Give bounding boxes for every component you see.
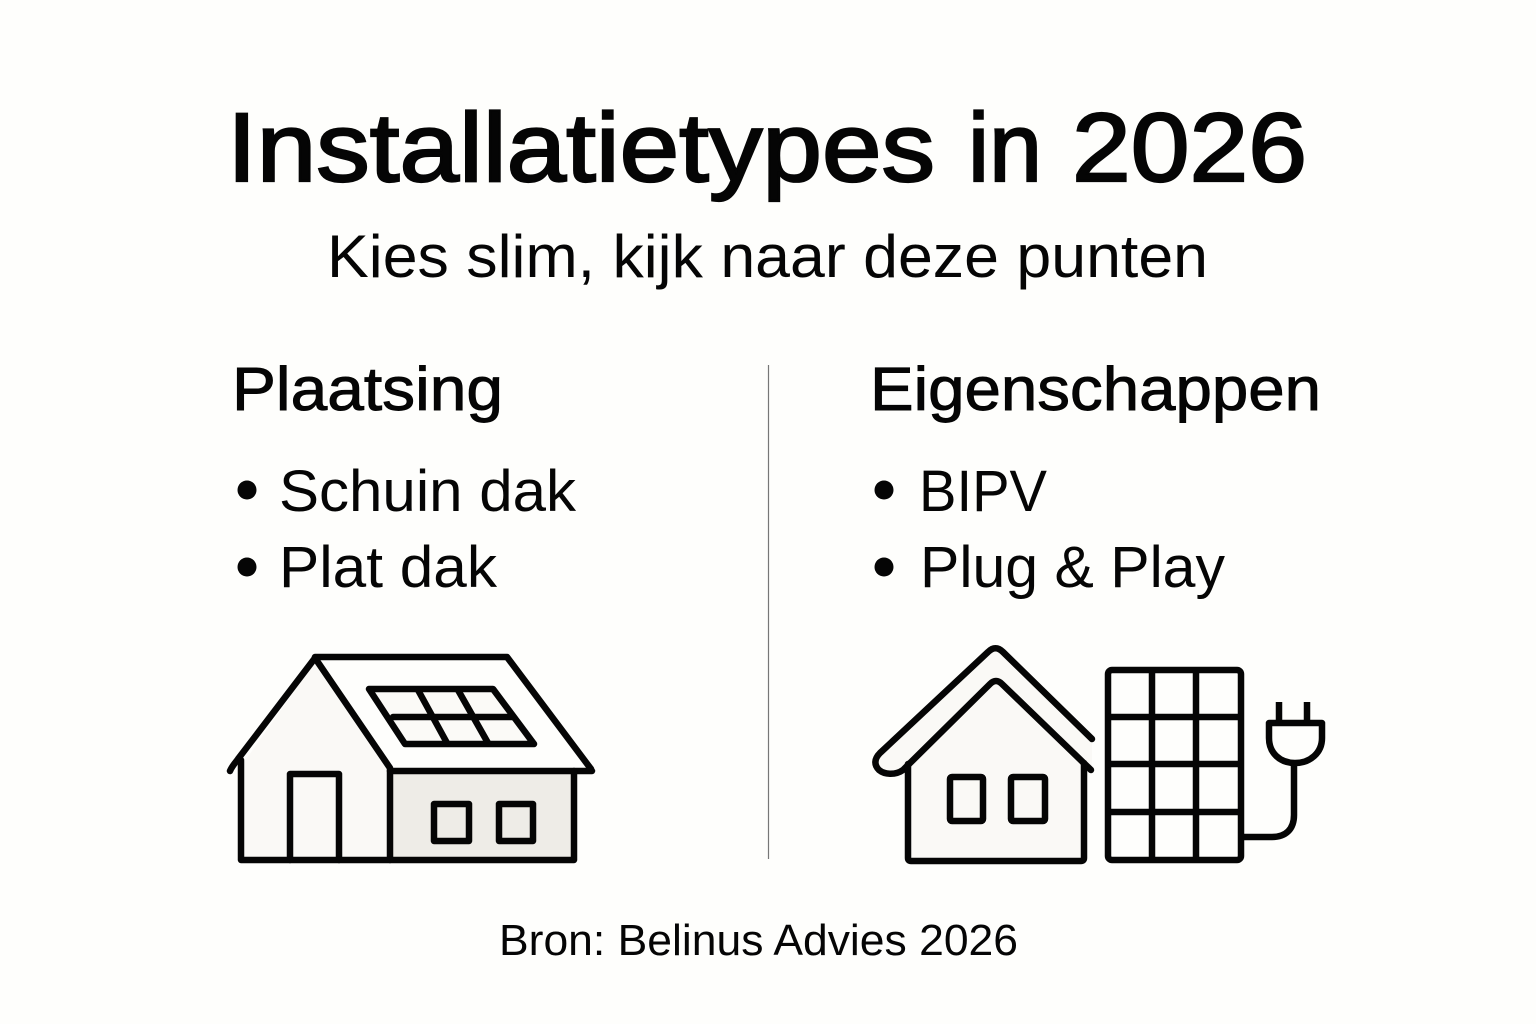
icon: plug with cable bbox=[1241, 702, 1322, 837]
column divider bbox=[768, 365, 770, 859]
icon: solar panel bbox=[1108, 670, 1241, 860]
title bbox=[227, 93, 1307, 202]
list item: plat dak: Plat dak bbox=[279, 535, 498, 600]
title: Installatietypes bbox=[227, 93, 935, 202]
icon: house with solar panels on a pitched roof bbox=[230, 657, 592, 860]
panel: eigenschappen bbox=[870, 355, 1322, 861]
source note: Bron: Belinus Advies 2026 bbox=[499, 916, 1018, 965]
title: 2026 bbox=[1072, 93, 1307, 202]
list item: schuin dak: Schuin dak bbox=[279, 459, 577, 524]
panel: plaatsing bbox=[230, 355, 592, 860]
list item: BIPV: BIPV bbox=[919, 459, 1047, 524]
subtitle: Kies slim, kijk naar deze punten bbox=[327, 223, 1208, 290]
icon: house with integrated roof bbox=[875, 647, 1092, 861]
list item: plug and play: Plug & Play bbox=[920, 535, 1225, 600]
heading: plaatsing: Plaatsing bbox=[232, 355, 503, 423]
title: in bbox=[968, 93, 1042, 202]
heading: eigenschappen: Eigenschappen bbox=[870, 355, 1321, 423]
